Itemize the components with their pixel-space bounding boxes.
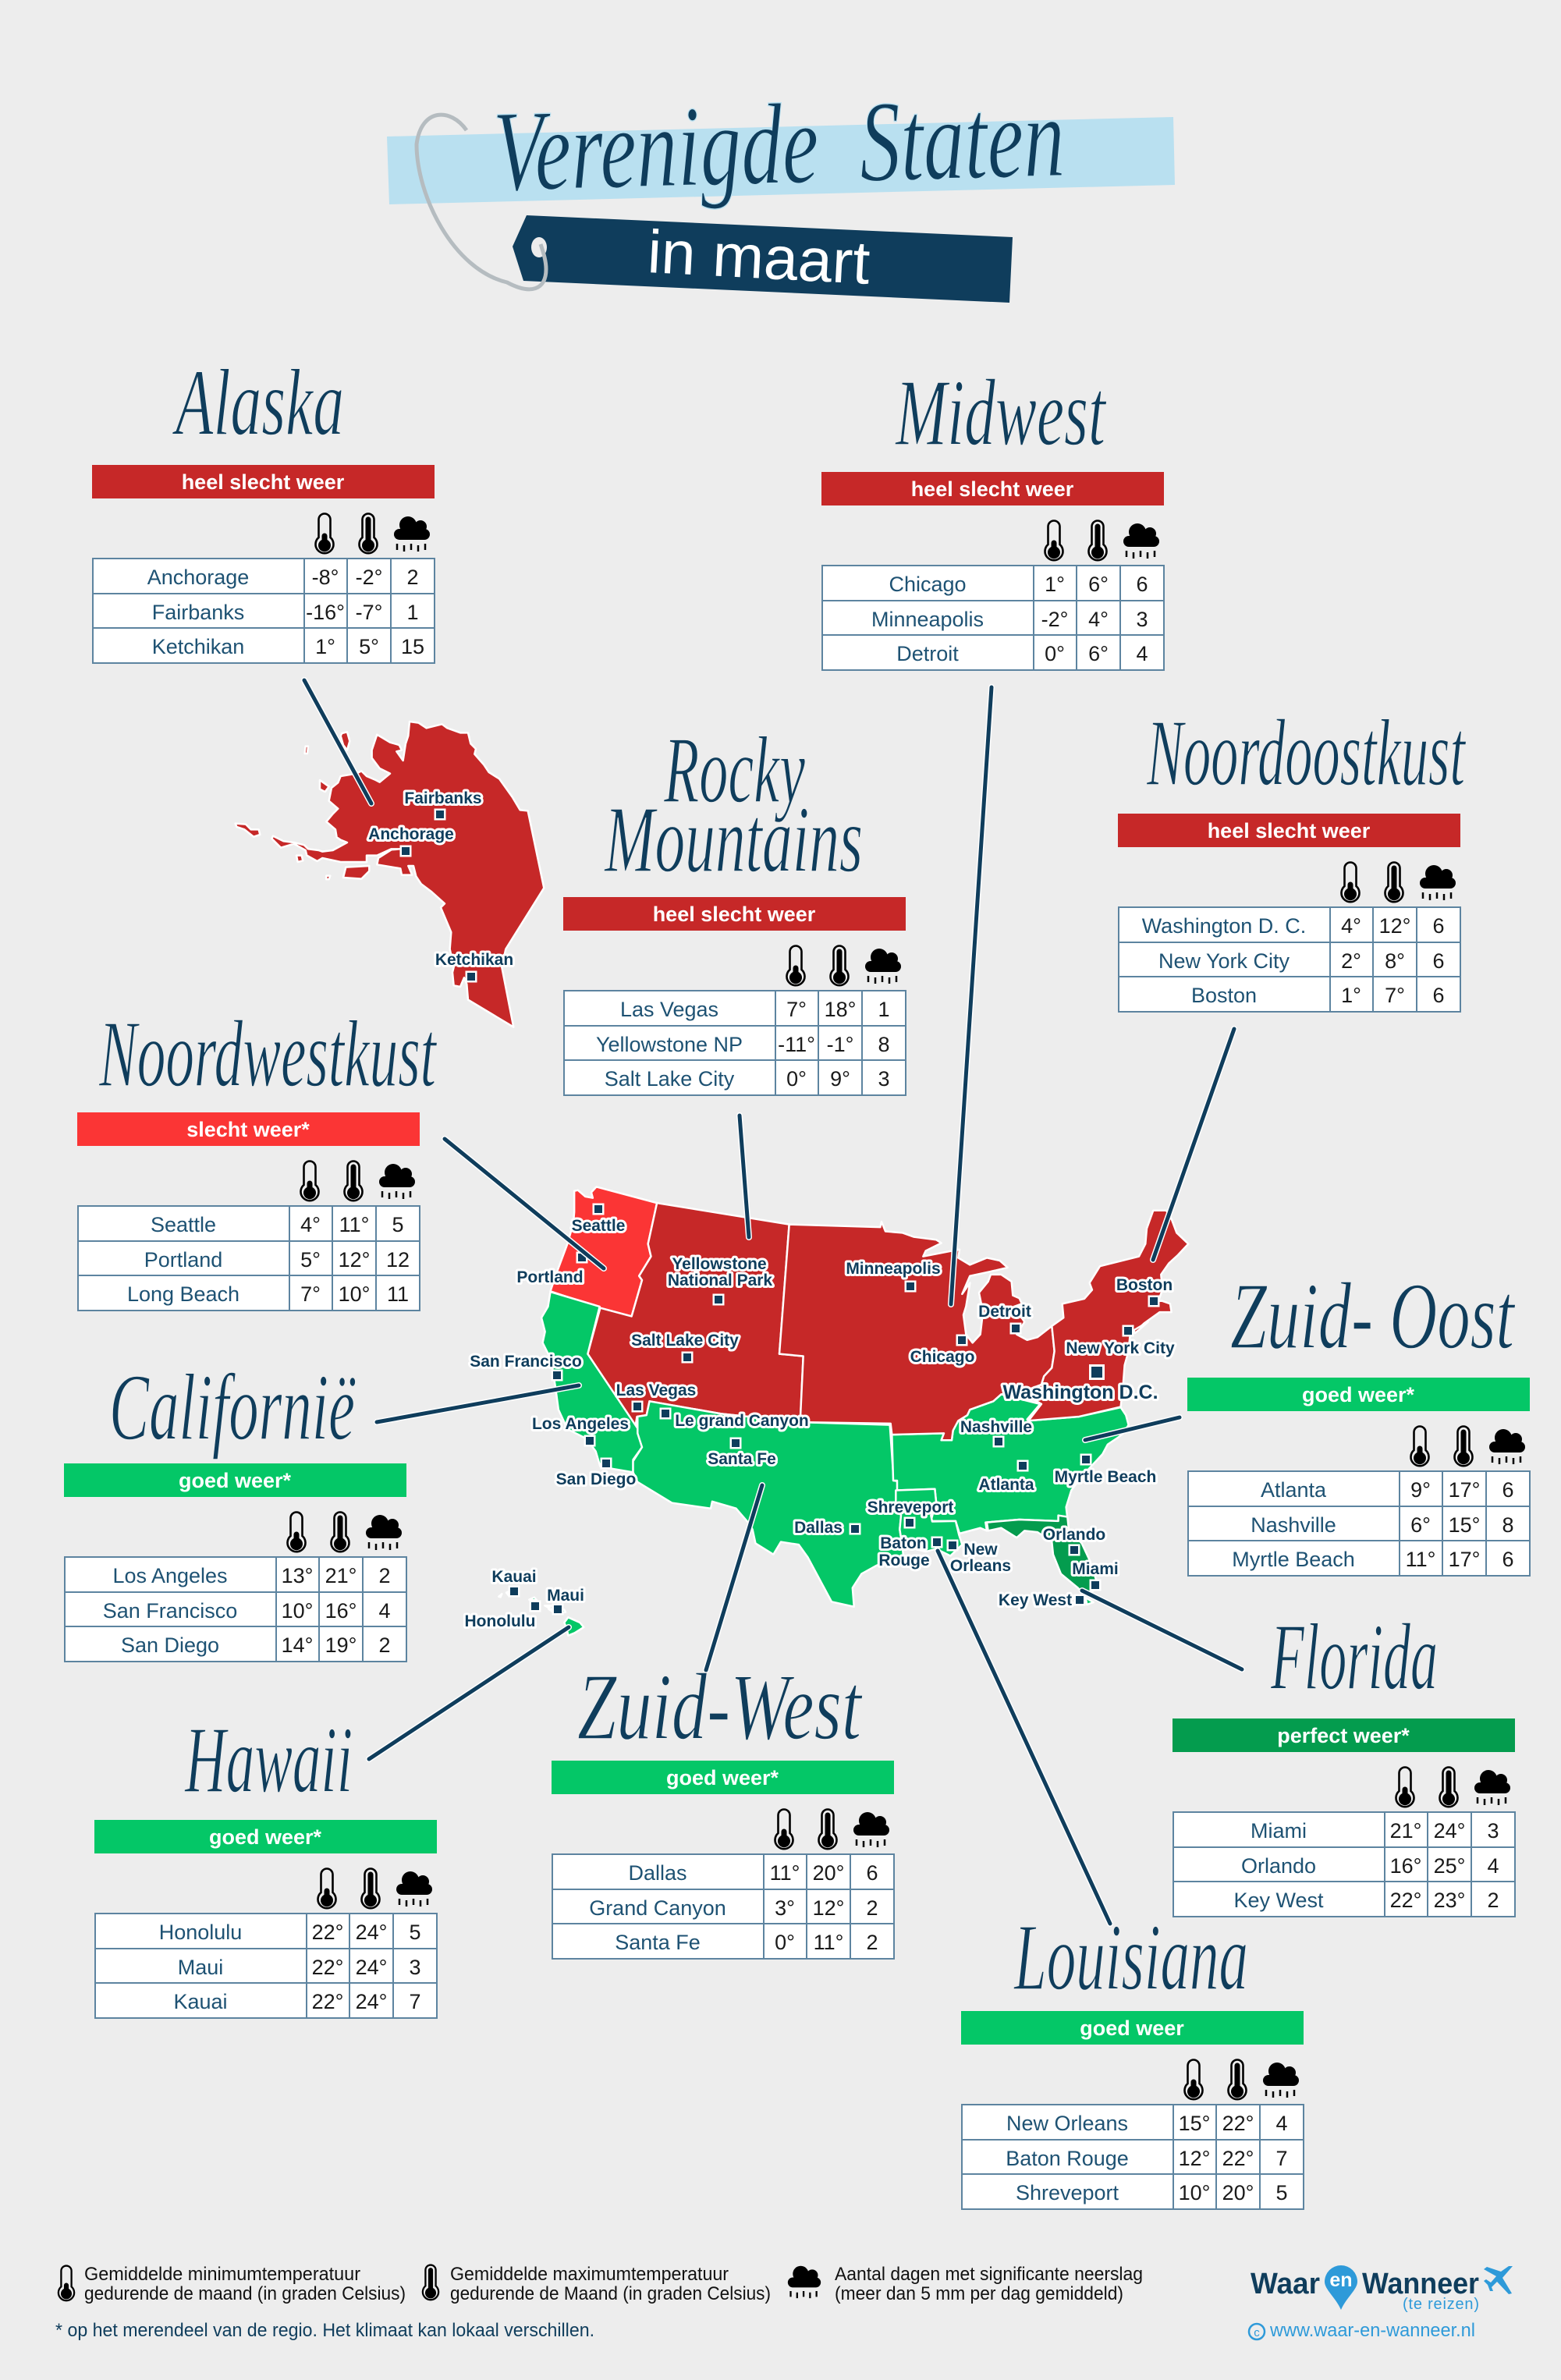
city: Washington D.C. (1002, 1364, 1158, 1403)
panel: Alaska (92, 350, 435, 663)
weather table: Midwest: 0° (1045, 642, 1065, 665)
weather table: Noordoostkust: 6 (1432, 914, 1445, 938)
region: Florida Keys (1086, 1598, 1094, 1605)
weather table: Zuid-Oost: 15° (1449, 1513, 1480, 1537)
title banner: Verenigde Staten: Verenigde Staten (492, 73, 1066, 216)
subtitle tag: in maart (513, 215, 1013, 303)
weather table: Florida: 23° (1434, 1889, 1465, 1912)
legend: rain days (788, 2264, 1143, 2304)
weather table: Zuid-West: 3° (775, 1896, 795, 1920)
legend: maximum temperature (423, 2264, 771, 2304)
weather table: Californië: Los Angeles (112, 1564, 228, 1587)
weather table: Noordoostkust: New York City (1158, 949, 1290, 973)
weather table: Zuid-Oost: Nashville (1251, 1513, 1336, 1537)
weather table: Noordwestkust (77, 1112, 420, 1311)
region: Californië (541, 1292, 642, 1472)
heading: Rocky Mountains: Rocky (663, 718, 806, 823)
city: Yellowstone National Park (668, 1255, 772, 1306)
city: Ketchikan: Ketchikan (435, 951, 513, 969)
weather table: Californië: 2 (378, 1633, 391, 1657)
city: Honolulu (465, 1601, 541, 1630)
weather table: Florida: perfect weer* (1277, 1724, 1410, 1747)
weather table: Florida: 22° (1390, 1889, 1421, 1912)
city: Portland: Portland (516, 1268, 584, 1286)
region: Zuid-West (633, 1401, 903, 1607)
panel: Californië (64, 1355, 406, 1662)
weather table: Midwest: 4° (1088, 608, 1109, 631)
city: Portland (516, 1251, 588, 1286)
weather table: Noordoostkust: heel slecht weer (1208, 819, 1371, 842)
city: Seattle: Seattle (572, 1217, 625, 1235)
city: Santa Fe: Santa Fe (708, 1450, 776, 1468)
arrow: Alaska leader (304, 680, 371, 803)
panel: Louisiana (961, 1905, 1304, 2209)
legend: minimum temperature (59, 2264, 406, 2304)
legend: rain days: (meer dan 5 mm per dag gemiddeld) (835, 2283, 1123, 2304)
city: San Francisco: San Francisco (470, 1353, 582, 1371)
weather table: Noordwestkust: Long Beach (127, 1282, 239, 1306)
city: Atlanta (978, 1460, 1034, 1494)
weather table: Zuid-West: 2 (866, 1931, 878, 1954)
weather table: Louisiana: goed weer (1080, 2016, 1184, 2040)
city: Washington D.C.: Washington D.C. (1002, 1382, 1158, 1403)
region: Florida (987, 1516, 1096, 1594)
city: Nashville: Nashville (960, 1418, 1032, 1436)
weather table: Florida: 25° (1434, 1854, 1465, 1878)
weather table: Zuid-West: 20° (813, 1861, 844, 1885)
icon: tag string (417, 115, 546, 289)
map: Hawaii islands (498, 1591, 584, 1636)
arrow: Zuid-West leader (706, 1485, 762, 1670)
city: San Diego: San Diego (556, 1470, 636, 1488)
weather table: Zuid-Oost: Atlanta (1261, 1478, 1327, 1502)
city: San Diego (556, 1457, 636, 1488)
weather table: Noordwestkust: 4° (300, 1213, 321, 1236)
weather table: Florida: 16° (1390, 1854, 1421, 1878)
heading: Florida: Florida (1270, 1605, 1438, 1710)
arrow: Rocky Mountains leader (740, 1116, 749, 1237)
weather table: Noordwestkust: 5 (392, 1213, 404, 1236)
weather table: Zuid-Oost: 6° (1410, 1513, 1431, 1537)
city: Baton Rouge: Baton (880, 1534, 927, 1552)
logo: Waar en Wanneer: (te reizen) (1403, 2296, 1479, 2313)
weather table: Californië: goed weer* (179, 1469, 292, 1492)
weather table: Midwest: 6° (1088, 573, 1109, 596)
city: Los Angeles: Los Angeles (532, 1415, 629, 1433)
weather table: Noordwestkust: 11° (339, 1213, 369, 1236)
city: Fairbanks: Fairbanks (404, 789, 482, 807)
weather table: Zuid-West: Grand Canyon (589, 1896, 726, 1920)
city: San Francisco (470, 1353, 582, 1381)
weather table: Hawaii: 22° (312, 1990, 343, 2013)
weather table: Midwest: Detroit (896, 642, 959, 665)
heading: Zuid-West: Zuid-West (577, 1655, 863, 1760)
map: Alaska (236, 722, 544, 1027)
city: Detroit (978, 1303, 1031, 1334)
panel: Zuid-Oost (1187, 1264, 1530, 1576)
map: western states (541, 1186, 903, 1607)
arrow: Noordwestkust leader (445, 1139, 604, 1268)
logo: Waar en Wanneer: Waar (1251, 2268, 1320, 2300)
weather table: Florida (1173, 1718, 1515, 1917)
logo: Waar en Wanneer (1251, 2265, 1513, 2313)
city: Las Vegas: Las Vegas (616, 1382, 696, 1399)
weather table: Rocky Mountains: Las Vegas (620, 998, 718, 1021)
weather table: Alaska: Fairbanks (152, 601, 244, 624)
city: Maui: Maui (547, 1587, 584, 1605)
weather table: Noordoostkust: 6 (1432, 949, 1445, 973)
weather table: Noordwestkust: 5° (300, 1248, 321, 1272)
weather table: Zuid-West: 11° (770, 1861, 800, 1885)
weather table: Louisiana: 22° (1222, 2147, 1254, 2170)
weather table: Louisiana: 10° (1179, 2181, 1210, 2204)
weather table: Louisiana: 22° (1222, 2112, 1254, 2135)
region: Long Island (1133, 1322, 1148, 1333)
weather table: Hawaii: 7 (409, 1990, 421, 2013)
panel: Midwest (821, 360, 1164, 670)
weather table: Hawaii: Honolulu (159, 1921, 242, 1944)
weather table: Noordwestkust: 10° (339, 1282, 370, 1306)
weather table: Hawaii: 24° (356, 1990, 387, 2013)
city: Miami (1072, 1560, 1119, 1591)
weather table: Rocky Mountains: -11° (778, 1033, 815, 1056)
weather table: Alaska: -7° (356, 601, 382, 624)
weather table: Rocky Mountains: -1° (827, 1033, 853, 1056)
weather table: Noordwestkust: 12 (386, 1248, 410, 1272)
weather table: Louisiana: 5 (1275, 2181, 1288, 2204)
city: Los Angeles (532, 1415, 629, 1446)
weather table: Midwest: heel slecht weer (911, 477, 1074, 501)
weather table: Hawaii: 24° (356, 1956, 387, 1979)
weather table: Hawaii: 5 (409, 1921, 421, 1944)
city: Atlanta: Atlanta (978, 1476, 1034, 1494)
weather table: Florida: Key West (1233, 1889, 1324, 1912)
weather table: Californië: 14° (282, 1633, 313, 1657)
city: New Orleans (947, 1540, 1011, 1575)
weather table: Noordoostkust: 1° (1341, 984, 1361, 1007)
city: Shreveport (867, 1499, 953, 1529)
heading: Alaska: Alaska (172, 350, 344, 456)
logo: Waar en Wanneer: en (1329, 2269, 1353, 2291)
heading: Louisiana: Louisiana (1013, 1905, 1248, 2010)
region: Zuidoost (892, 1394, 1129, 1534)
weather table: Rocky Mountains: heel slecht weer (653, 903, 816, 926)
panel: Noordwestkust (77, 1002, 438, 1311)
weather table: Zuid-West: Dallas (628, 1861, 687, 1885)
weather table: Zuid-West: 12° (813, 1896, 844, 1920)
weather table: Zuid-Oost: 9° (1410, 1478, 1431, 1502)
weather table: Louisiana: Baton Rouge (1006, 2147, 1129, 2170)
weather table: Alaska: 2 (406, 566, 419, 589)
city: Orlando (1043, 1526, 1105, 1555)
legend: minimum temperature: gedurende de maand (in graden Celsius) (84, 2283, 406, 2304)
weather table: Noordwestkust: Portland (144, 1248, 222, 1272)
weather table: Rocky Mountains: 18° (825, 998, 856, 1021)
weather table: Rocky Mountains: 9° (830, 1067, 850, 1091)
city: Boston (1116, 1276, 1173, 1307)
weather table: Hawaii: 3 (409, 1956, 421, 1979)
weather table: Zuid-Oost: 17° (1449, 1548, 1480, 1571)
weather table: Hawaii (94, 1820, 437, 2018)
weather table: Zuid-West: 6 (866, 1861, 878, 1885)
weather table: Californië (64, 1463, 406, 1662)
weather table: Zuid-Oost: goed weer* (1302, 1383, 1415, 1406)
weather table: Louisiana: 20° (1222, 2181, 1254, 2204)
weather table: Midwest: 1° (1045, 573, 1065, 596)
weather table: Rocky Mountains: 8 (878, 1033, 890, 1056)
map: eastern states (779, 1211, 1188, 1605)
arrow: Midwest leader (951, 687, 992, 1304)
panel: Florida (1173, 1605, 1515, 1917)
weather table: Florida: Orlando (1241, 1854, 1316, 1878)
map city labels (368, 789, 1175, 1630)
weather table: Florida: 24° (1434, 1819, 1465, 1843)
weather table: Alaska (92, 465, 435, 663)
weather table: Louisiana: New Orleans (1006, 2112, 1128, 2135)
weather table: Alaska: heel slecht weer (182, 470, 345, 494)
weather table: Louisiana: 12° (1179, 2147, 1210, 2170)
copyright: website: www.waar-en-wanneer.nl (1269, 2320, 1475, 2341)
city: Anchorage: Anchorage (368, 825, 454, 843)
heading: Noordwestkust: Noordwestkust (98, 1002, 438, 1107)
city: Anchorage (368, 825, 454, 857)
weather table: Midwest: 6° (1088, 642, 1109, 665)
weather table: Midwest: -2° (1041, 608, 1068, 631)
city: Las Vegas (616, 1382, 696, 1412)
weather table: Zuid-West (552, 1761, 894, 1959)
legend: maximum temperature: Gemiddelde maximumtemperatuur (450, 2264, 729, 2285)
weather table: Alaska: -16° (306, 601, 345, 624)
region: Rocky Mountains (587, 1203, 804, 1428)
weather table: Noordoostkust: 7° (1385, 984, 1405, 1007)
weather table: Alaska: 1 (406, 601, 419, 624)
weather table: Zuid-Oost: 8 (1502, 1513, 1514, 1537)
city: Orlando: Orlando (1043, 1526, 1105, 1544)
city: Miami: Miami (1072, 1560, 1119, 1578)
weather table: Louisiana: 15° (1179, 2112, 1210, 2135)
weather table: Hawaii: 24° (356, 1921, 387, 1944)
arrow: Florida leader (1082, 1591, 1242, 1669)
arrow: Louisiana leader (938, 1551, 1110, 1924)
heading: Midwest: Midwest (895, 360, 1107, 466)
city: Detroit: Detroit (978, 1303, 1031, 1321)
footnote: * op het merendeel van de regio. Het klimaat kan lokaal verschillen. (55, 2320, 594, 2341)
weather table: Zuid-West: 2 (866, 1896, 878, 1920)
city: Baton Rouge: Rouge (878, 1552, 930, 1570)
weather table: Alaska: 1° (315, 635, 335, 658)
region: Midwest (779, 1222, 1055, 1440)
weather table: Rocky Mountains: 0° (786, 1067, 807, 1091)
city: New York City: New York City (1066, 1339, 1175, 1357)
weather table: Zuid-West: 11° (814, 1931, 843, 1954)
legend: maximum temperature: gedurende de Maand (in graden Celsius) (450, 2283, 771, 2304)
weather table: Midwest: 3 (1136, 608, 1148, 631)
weather table: Noordwestkust: 11 (387, 1282, 409, 1306)
weather table: Noordoostkust: 4° (1341, 914, 1361, 938)
city: Dallas: Dallas (794, 1519, 843, 1537)
weather table: Alaska: 15 (401, 635, 424, 658)
subtitle tag: in maart: in maart (646, 217, 872, 297)
heading: Hawaii: Hawaii (184, 1708, 353, 1813)
weather table: Midwest: 4 (1136, 642, 1148, 665)
weather table: Louisiana: Shreveport (1016, 2181, 1119, 2204)
weather table: Alaska: Ketchikan (152, 635, 244, 658)
weather table: Zuid-Oost: Myrtle Beach (1232, 1548, 1355, 1571)
weather table: Midwest (821, 472, 1164, 670)
city: Myrtle Beach: Myrtle Beach (1055, 1468, 1156, 1486)
city: Kauai (491, 1568, 537, 1598)
weather table: Californië: 21° (325, 1564, 357, 1587)
weather table: Noordoostkust: 2° (1341, 949, 1361, 973)
weather table: Zuid-Oost (1187, 1378, 1530, 1576)
weather table: Zuid-Oost: 17° (1449, 1478, 1480, 1502)
city: Baton Rouge (878, 1534, 942, 1570)
weather table: Californië: 2 (378, 1564, 391, 1587)
weather table: Louisiana: 7 (1275, 2147, 1288, 2170)
weather table: Florida: Miami (1251, 1819, 1307, 1843)
copyright: website: c (1254, 2326, 1260, 2339)
region: Louisiana (896, 1489, 962, 1555)
weather table: Florida: 3 (1487, 1819, 1499, 1843)
weather table: Midwest: 6 (1136, 573, 1148, 596)
weather table: Midwest: Minneapolis (871, 608, 984, 631)
weather table: Noordoostkust: 8° (1385, 949, 1405, 973)
weather table: Hawaii: 22° (312, 1921, 343, 1944)
weather table: Zuid-Oost: 11° (1406, 1548, 1435, 1571)
heading: Rocky Mountains: Mountains (604, 787, 863, 892)
city: Maui (547, 1587, 584, 1615)
panel: Noordoostkust (1118, 701, 1467, 1012)
weather table: Californië: 13° (282, 1564, 313, 1587)
weather table: Noordoostkust: Boston (1191, 984, 1257, 1007)
city: Shreveport: Shreveport (867, 1499, 953, 1516)
weather table: Noordwestkust: Seattle (151, 1213, 216, 1236)
city: Myrtle Beach (1055, 1454, 1156, 1486)
weather table: Californië: San Diego (121, 1633, 219, 1657)
legend: minimum temperature: Gemiddelde minimumtemperatuur (84, 2264, 360, 2285)
city: Fairbanks (404, 789, 482, 821)
weather table: Rocky Mountains: 3 (878, 1067, 890, 1091)
weather table: Rocky Mountains: Yellowstone NP (596, 1033, 743, 1056)
arrow: Hawaii leader (369, 1627, 569, 1759)
weather table: Florida: 2 (1487, 1889, 1499, 1912)
weather table: Florida: 4 (1487, 1854, 1499, 1878)
logo: Waar en Wanneer: Wanneer (1362, 2268, 1479, 2300)
weather table: Californië: 19° (325, 1633, 357, 1657)
weather table: Noordwestkust: 7° (300, 1282, 321, 1306)
city: Santa Fe (708, 1437, 776, 1468)
weather table: Noordoostkust (1118, 814, 1460, 1012)
city: Yellowstone National Park: Yellowstone (672, 1255, 767, 1273)
weather table: Hawaii: goed weer* (209, 1825, 322, 1849)
panel: Hawaii (94, 1708, 437, 2018)
weather table: Rocky Mountains (563, 897, 906, 1095)
weather table: Alaska: 5° (359, 635, 379, 658)
weather table: Rocky Mountains: Salt Lake City (605, 1067, 735, 1091)
region: Noordoostkust (1024, 1211, 1188, 1421)
weather table: Zuid-Oost: 6 (1502, 1478, 1514, 1502)
heading: Rocky Mountains (604, 718, 863, 892)
weather table: Hawaii: 22° (312, 1956, 343, 1979)
city: Yellowstone National Park: National Park (668, 1272, 772, 1289)
city: Chicago: Chicago (910, 1348, 974, 1366)
city: Salt Lake City (631, 1332, 739, 1364)
city: Minneapolis (846, 1260, 941, 1292)
region: Noordwestkust (551, 1186, 657, 1316)
weather table: Louisiana: 4 (1275, 2112, 1288, 2135)
weather table: Californië: 16° (325, 1599, 357, 1623)
weather table: Zuid-West: goed weer* (666, 1766, 779, 1789)
heading: Californië: Californië (109, 1355, 356, 1460)
panel: Zuid-West (552, 1655, 894, 1959)
city: New Orleans: Orleans (950, 1557, 1011, 1575)
weather table: Californië: 4 (378, 1599, 391, 1623)
panel: Rocky Mountains (563, 718, 906, 1095)
weather table: Californië: San Francisco (103, 1599, 237, 1623)
weather table: Noordoostkust: Washington D. C. (1142, 914, 1306, 938)
weather table: Alaska: -8° (312, 566, 339, 589)
weather table: Alaska: Anchorage (147, 566, 249, 589)
city: Seattle (572, 1203, 625, 1235)
city: Minneapolis: Minneapolis (846, 1260, 941, 1278)
city: New Orleans: New (963, 1541, 998, 1559)
weather table: Zuid-Oost: 6 (1502, 1548, 1514, 1571)
city: Nashville (960, 1418, 1032, 1448)
legend: rain days: Aantal dagen met significante neerslag (835, 2264, 1143, 2285)
weather table: Rocky Mountains: 1 (878, 998, 890, 1021)
arrow: Zuid-Oost leader (1085, 1417, 1180, 1440)
arrow: Californië leader (377, 1385, 579, 1422)
weather table: Zuid-West: 0° (775, 1931, 795, 1954)
weather table: Florida: 21° (1390, 1819, 1421, 1843)
weather table: Noordoostkust: 6 (1432, 984, 1445, 1007)
city: Honolulu: Honolulu (465, 1612, 535, 1630)
weather table: Midwest: Chicago (889, 573, 967, 596)
arrow: Noordoostkust leader (1153, 1029, 1234, 1260)
city: Key West: Key West (999, 1591, 1072, 1609)
weather table: Louisiana (961, 2011, 1304, 2209)
city: Ketchikan (435, 951, 513, 983)
weather table: Noordwestkust: 12° (339, 1248, 370, 1272)
weather table: Noordoostkust: 12° (1379, 914, 1410, 938)
weather table: Hawaii: Kauai (173, 1990, 228, 2013)
city: Boston: Boston (1116, 1276, 1173, 1294)
weather table: Californië: 10° (282, 1599, 313, 1623)
weather table: Alaska: -2° (356, 566, 382, 589)
city: Chicago (910, 1334, 974, 1366)
weather table: Zuid-West: Santa Fe (615, 1931, 701, 1954)
weather table: Noordwestkust: slecht weer* (186, 1118, 310, 1141)
city: Le grand Canyon: Le grand Canyon (675, 1412, 809, 1430)
city: New York City (1066, 1325, 1175, 1357)
city: Kauai: Kauai (491, 1568, 537, 1586)
weather table: Hawaii: Maui (178, 1956, 223, 1979)
weather table: Rocky Mountains: 7° (786, 998, 807, 1021)
city: Salt Lake City: Salt Lake City (631, 1332, 739, 1350)
